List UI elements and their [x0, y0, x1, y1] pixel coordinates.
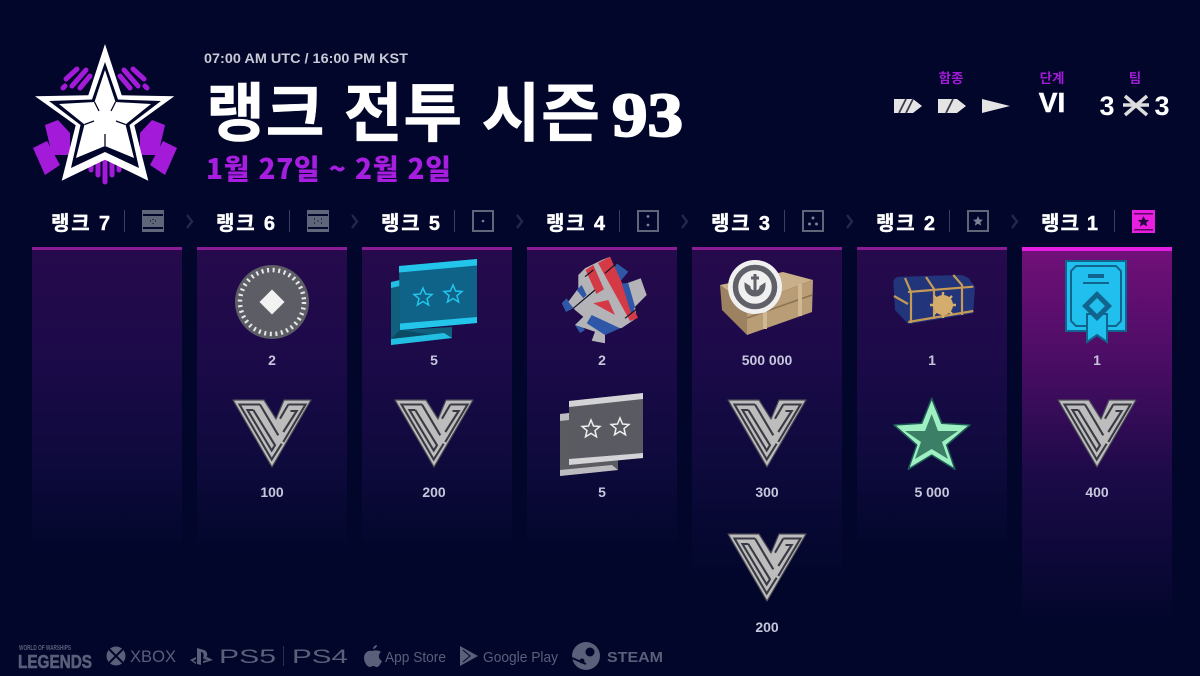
icon: V currency	[1058, 400, 1136, 467]
count: 100	[260, 484, 284, 500]
rank header: 1: 랭크 1	[1041, 212, 1098, 235]
count: 2	[268, 352, 276, 368]
logo: Legends: WORLD OF WARSHIPS	[19, 643, 71, 652]
logo: Xbox	[106, 646, 176, 666]
icon: battleship	[982, 99, 1010, 113]
team format block: 3	[1099, 91, 1115, 121]
panel: rank 3	[692, 247, 842, 647]
rank header: 4	[546, 210, 658, 235]
rank header: 1	[1041, 210, 1155, 235]
count: 2	[598, 352, 606, 368]
count: 5 000	[914, 484, 950, 500]
time text: 07:00 AM UTC / 16:00 PM KST	[204, 50, 408, 66]
rank header: 6: 랭크 6	[216, 212, 275, 235]
logo: Steam: STEAM	[607, 650, 663, 666]
arrow	[1012, 215, 1017, 228]
tier block: 단계	[1040, 67, 1064, 87]
icon: V currency	[728, 534, 806, 601]
panel: rank 2	[857, 247, 1007, 557]
rank header: 4: 랭크 4	[546, 212, 606, 235]
count: 1	[928, 352, 936, 368]
rank header: 5	[381, 210, 493, 235]
count: 200	[755, 619, 779, 635]
rank header: 3	[711, 210, 823, 235]
icon: cruiser	[938, 99, 966, 113]
count: 5	[598, 484, 606, 500]
icon: V currency	[233, 400, 311, 467]
rank header: 7	[51, 210, 164, 235]
rank header: 2	[876, 210, 988, 235]
tier block: VI	[1039, 87, 1065, 118]
panel: rank 5	[362, 247, 512, 557]
count: 300	[755, 484, 779, 500]
count: 5	[430, 352, 438, 368]
arrow	[517, 215, 522, 228]
ship types block	[894, 67, 1010, 113]
panel: rank 4	[527, 247, 677, 557]
logo: App Store: App Store	[385, 650, 446, 666]
logo: Steam	[572, 642, 663, 670]
icon: gold and navy chest	[893, 275, 975, 324]
icon: grey round camouflage token	[235, 265, 309, 339]
logo: Legends	[18, 643, 92, 672]
logo: PS5 and PS4: PS4	[292, 647, 349, 668]
icon: union flag camouflage	[562, 257, 647, 343]
title: 랭크 전투 시즌	[206, 63, 600, 155]
logo: Google Play: Google Play	[483, 650, 559, 666]
icon: wooden crate with credit token	[720, 260, 813, 335]
icon: grey signal flags	[560, 393, 643, 476]
arrow	[187, 215, 192, 228]
arrow	[682, 215, 687, 228]
count: 200	[422, 484, 446, 500]
icon: blue signal flags	[391, 259, 477, 345]
arrow	[847, 215, 852, 228]
logo: rank star emblem	[33, 44, 177, 182]
panel: rank 6	[197, 247, 347, 557]
icon: green star	[894, 398, 970, 469]
logo: App Store	[364, 645, 446, 667]
icon: crossed swords	[1123, 96, 1149, 115]
rank header: 3: 랭크 3	[711, 212, 770, 235]
icon: destroyer	[894, 99, 922, 113]
panel: rank 7	[32, 247, 182, 557]
team format block: 팀	[1129, 67, 1141, 87]
team format block	[1099, 67, 1170, 121]
panel: rank 1	[1022, 247, 1172, 632]
date range: 1월 27일 ~ 2월 2일	[206, 148, 451, 188]
icon: blue certificate	[1066, 261, 1126, 342]
team format block: 3	[1154, 91, 1170, 121]
footer: platform logos	[18, 642, 663, 672]
icon: V currency	[728, 400, 806, 467]
rank header: 6	[216, 210, 329, 235]
count: 1	[1093, 352, 1101, 368]
rank header: 2: 랭크 2	[876, 212, 935, 235]
count: 400	[1085, 484, 1109, 500]
logo: PS5 and PS4: PS5	[219, 647, 276, 668]
logo: Xbox: XBOX	[130, 647, 176, 666]
count: 500 000	[742, 352, 793, 368]
ship types block: 함종	[939, 67, 963, 87]
rank header: 7: 랭크 7	[51, 212, 110, 235]
rank header: 5: 랭크 5	[381, 212, 440, 235]
arrow	[352, 215, 357, 228]
logo: PS5 and PS4	[190, 646, 349, 668]
icon: V currency	[395, 400, 473, 467]
title: 93	[612, 82, 683, 150]
logo: Google Play	[460, 646, 559, 666]
logo: Legends: LEGENDS	[18, 652, 92, 672]
tier block	[1039, 67, 1065, 118]
